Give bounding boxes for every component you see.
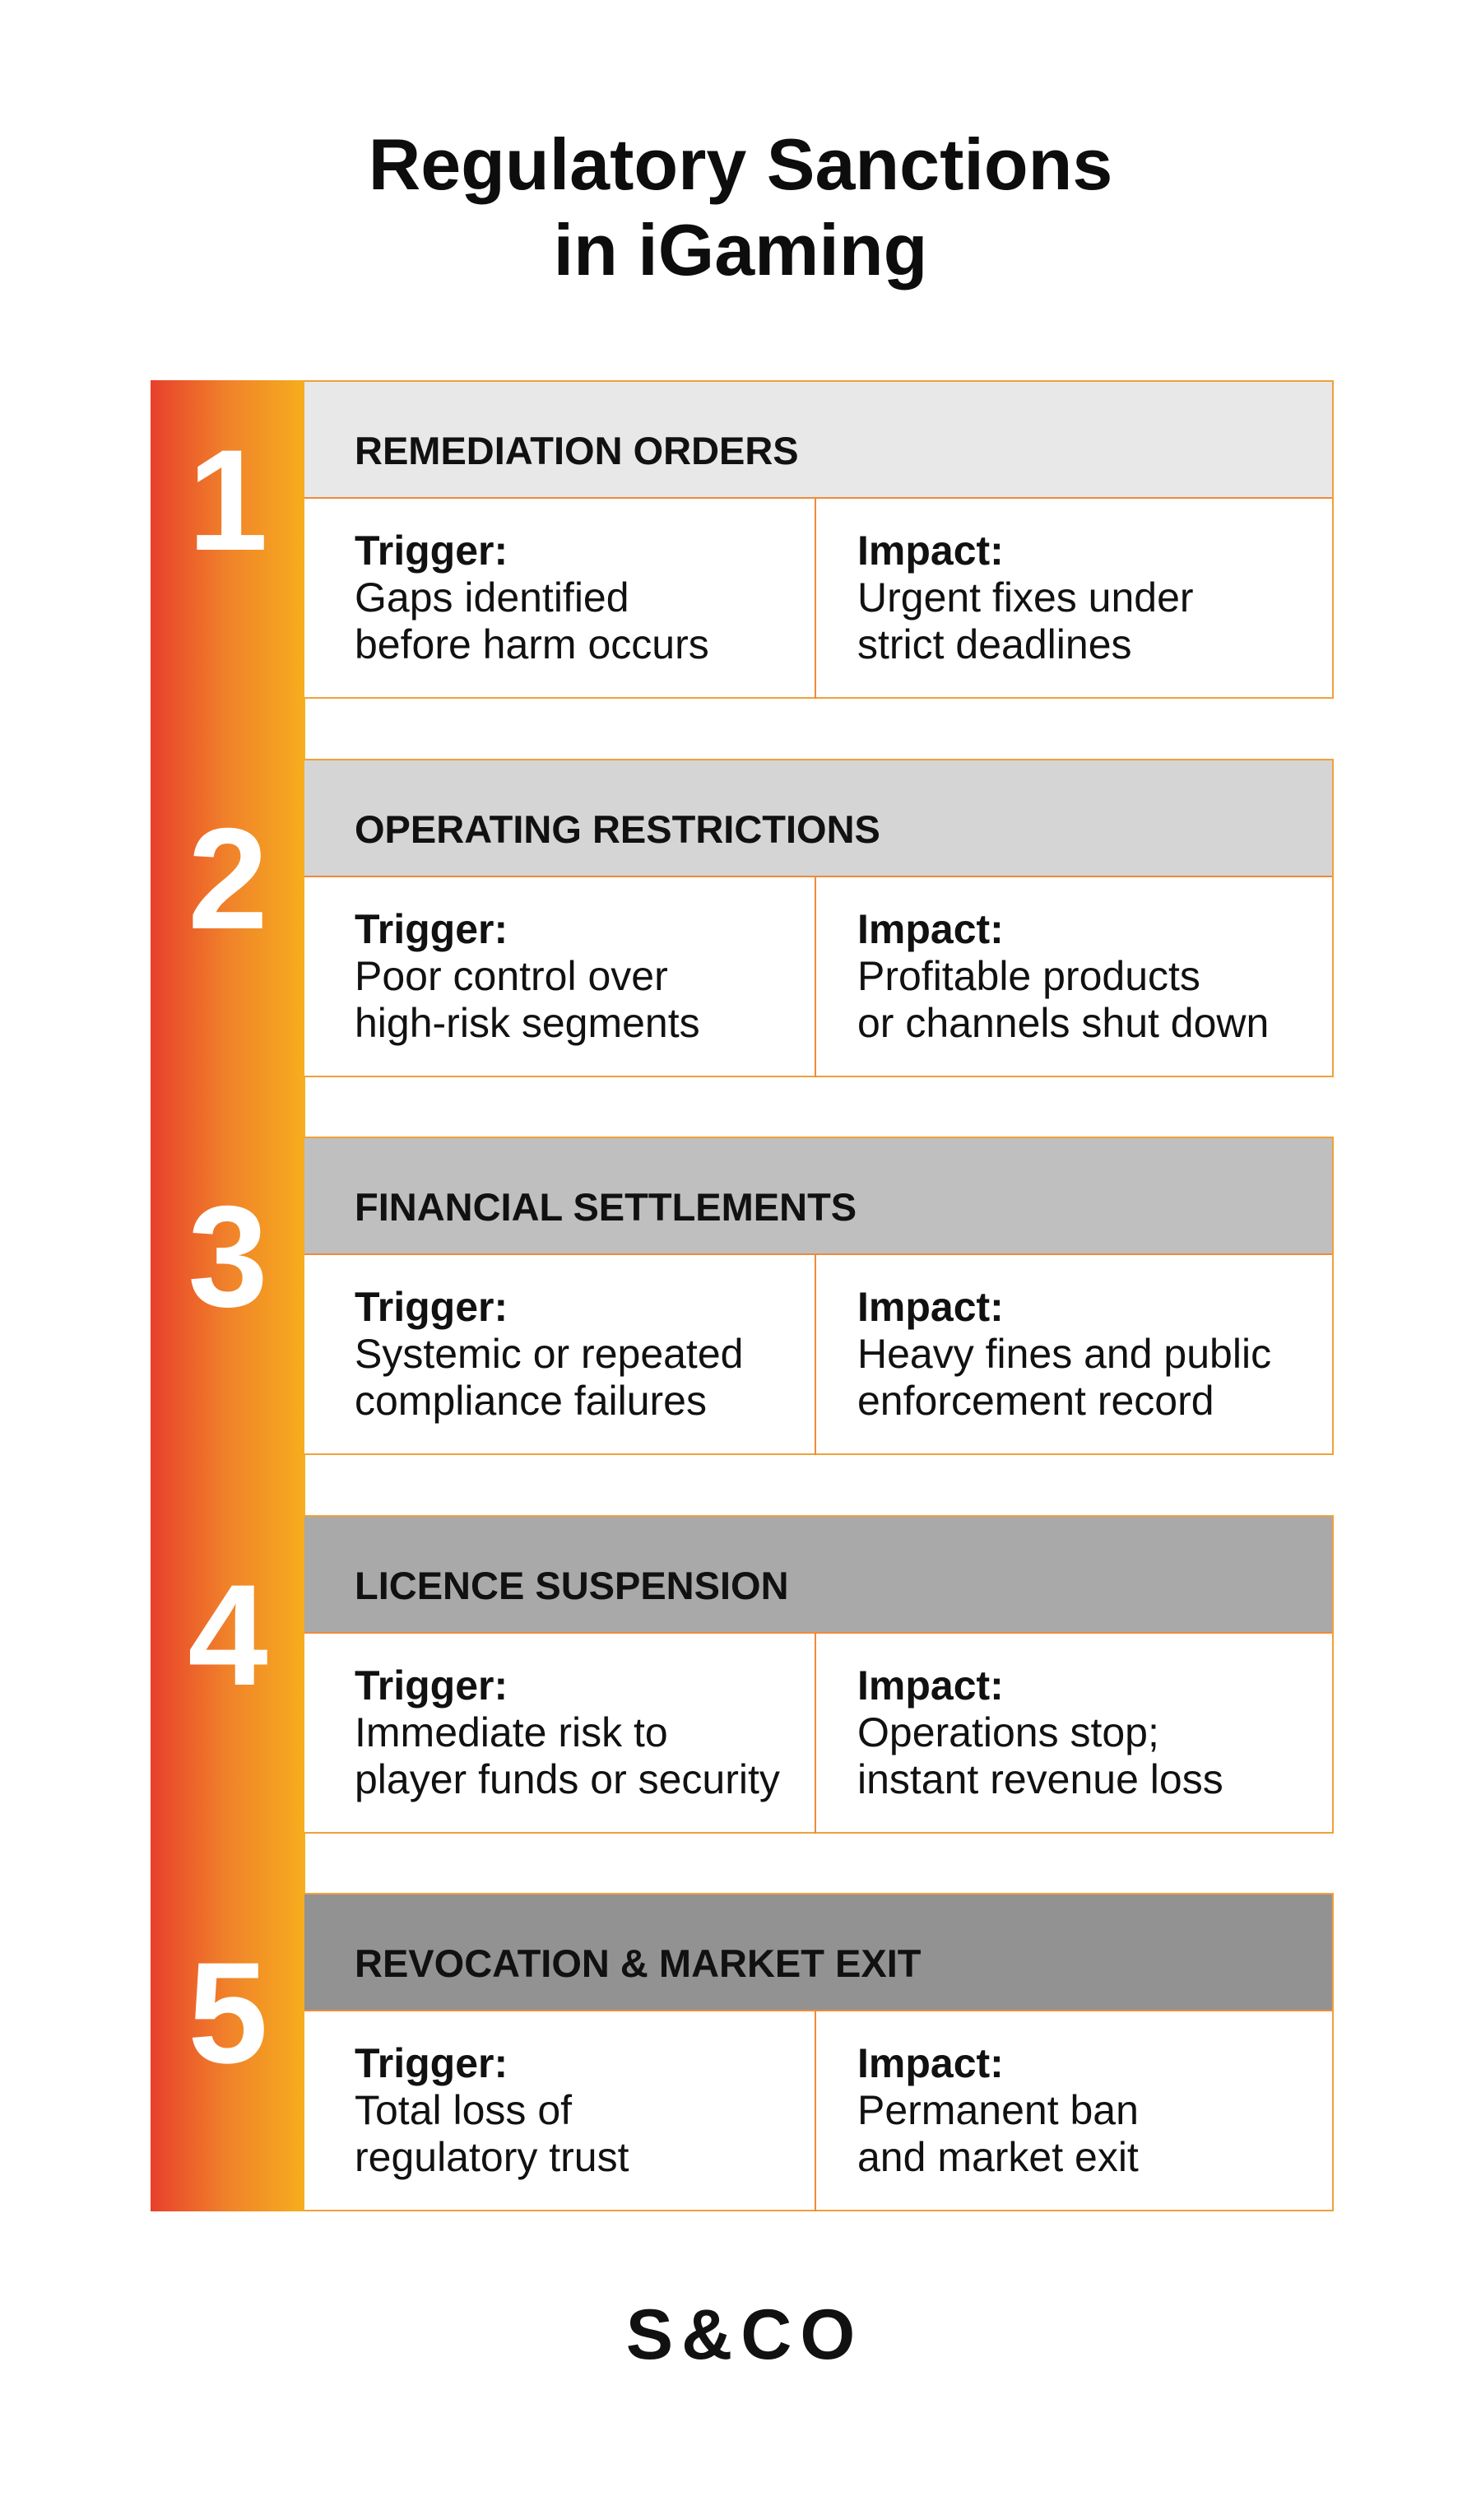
body row (355, 1255, 1271, 1455)
impact text: Profitable products (857, 953, 1200, 999)
impact text (857, 528, 1194, 667)
trigger text: player funds or security (355, 1756, 780, 1802)
number 3: 3 (188, 1177, 268, 1337)
heading: operating restrictions (304, 760, 1332, 877)
impact text: and market exit (857, 2134, 1139, 2180)
trigger text: Trigger: (355, 2040, 508, 2086)
impact text (857, 906, 1269, 1046)
panel: operating restrictions (304, 759, 1334, 1077)
body row (355, 1634, 1223, 1834)
impact text: Urgent fixes under (857, 574, 1194, 621)
heading: licence suspension: LICENCE SUSPENSION (355, 1564, 789, 1607)
heading: remediation orders: REMEDIATION ORDERS (355, 429, 799, 472)
trigger text: Gaps identified (355, 574, 629, 621)
impact text: Permanent ban (857, 2087, 1139, 2133)
impact text: Impact: (857, 528, 1004, 574)
trigger text: before harm occurs (355, 621, 709, 667)
panel: revocation & market exit (304, 1893, 1334, 2211)
impact text: instant revenue loss (857, 1756, 1223, 1802)
heading: financial settlements (304, 1138, 1332, 1255)
impact text: Heavy fines and public (857, 1331, 1271, 1377)
title: in iGaming (554, 209, 927, 291)
panel: licence suspension (304, 1515, 1334, 1834)
trigger text: high-risk segments (355, 1000, 700, 1046)
heading: revocation & market exit: REVOCATION & MARKET EXIT (355, 1941, 921, 1985)
heading: licence suspension (304, 1517, 1332, 1634)
logo: S&CO (626, 2295, 863, 2374)
trigger text (355, 1284, 743, 1424)
title (369, 123, 1112, 291)
gradient number bar (151, 380, 305, 2211)
impact text: or channels shut down (857, 1000, 1269, 1046)
title: Regulatory Sanctions (369, 123, 1112, 205)
trigger text: Trigger: (355, 528, 508, 574)
impact text: Impact: (857, 2040, 1004, 2086)
trigger text (355, 528, 709, 667)
heading: financial settlements: FINANCIAL SETTLEMENTS (355, 1185, 857, 1229)
trigger text (355, 906, 700, 1046)
impact text: Operations stop; (857, 1709, 1159, 1755)
number 5: 5 (188, 1933, 268, 2094)
heading: remediation orders (304, 382, 1332, 499)
panel: remediation orders (304, 380, 1334, 699)
impact text (857, 1284, 1271, 1424)
impact text (857, 2040, 1139, 2180)
number 4: 4 (188, 1555, 268, 1716)
impact text: Impact: (857, 906, 1004, 952)
trigger text (355, 1662, 780, 1802)
trigger text: regulatory trust (355, 2134, 629, 2180)
number 1: 1 (188, 421, 268, 581)
trigger text: Immediate risk to (355, 1709, 668, 1755)
impact text (857, 1662, 1223, 1802)
trigger text: compliance failures (355, 1378, 707, 1424)
impact text: enforcement record (857, 1378, 1214, 1424)
trigger text: Trigger: (355, 1662, 508, 1709)
panel: financial settlements (304, 1137, 1334, 1455)
trigger text: Poor control over (355, 953, 668, 999)
impact text: Impact: (857, 1662, 1004, 1709)
number 2: 2 (188, 799, 268, 960)
body row (355, 499, 1194, 699)
trigger text: Systemic or repeated (355, 1331, 743, 1377)
impact text: strict deadlines (857, 621, 1132, 667)
impact text: Impact: (857, 1284, 1004, 1330)
body row (355, 2011, 1139, 2211)
heading: operating restrictions: OPERATING RESTRICTIONS (355, 807, 880, 851)
trigger text: Trigger: (355, 1284, 508, 1330)
trigger text (355, 2040, 629, 2180)
trigger text: Trigger: (355, 906, 508, 952)
body row (355, 877, 1269, 1077)
heading: revocation & market exit (304, 1895, 1332, 2011)
trigger text: Total loss of (355, 2087, 572, 2133)
